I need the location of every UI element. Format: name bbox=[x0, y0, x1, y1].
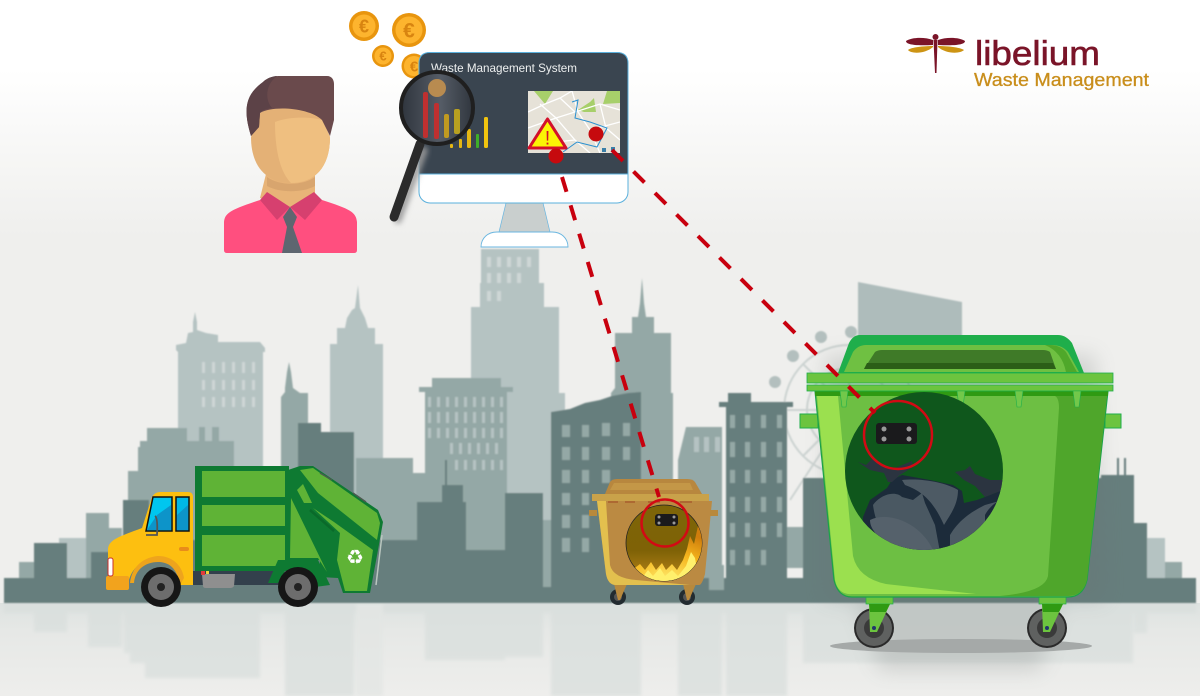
fuel tank bbox=[202, 574, 235, 588]
wheels bbox=[610, 584, 696, 605]
lid bbox=[838, 335, 1084, 373]
dragonfly icon bbox=[906, 34, 965, 73]
coin: € bbox=[359, 16, 369, 36]
cargo box bbox=[195, 466, 289, 571]
collar bbox=[260, 192, 322, 220]
lid opening bbox=[864, 350, 1056, 369]
magnified bars bbox=[423, 92, 460, 139]
top band bbox=[815, 391, 1108, 396]
body bbox=[597, 501, 712, 585]
stand base bbox=[481, 232, 568, 247]
coin: € bbox=[379, 48, 387, 64]
magnified coin bbox=[428, 79, 446, 97]
alert dot bbox=[548, 148, 564, 164]
knot right bbox=[955, 466, 1003, 497]
hole bbox=[845, 392, 1003, 550]
tie bbox=[282, 207, 302, 253]
bag panel bbox=[902, 479, 958, 525]
left highlight bbox=[597, 501, 690, 585]
tail lights bbox=[201, 571, 205, 575]
headlight bbox=[108, 558, 113, 576]
tower windows bbox=[202, 257, 531, 407]
cargo panels bbox=[202, 471, 285, 566]
cab arch highlight bbox=[130, 556, 184, 585]
coin: € bbox=[403, 20, 415, 42]
rear wheel arch bbox=[268, 560, 330, 587]
mirror bbox=[146, 516, 157, 535]
dashed link: monitor to large bin bbox=[612, 150, 875, 413]
dark-building windows bbox=[562, 415, 782, 565]
subtitle: Waste Management bbox=[974, 70, 1149, 90]
rim dashes bbox=[608, 501, 692, 503]
tailgate rail bbox=[376, 535, 382, 585]
right shade bbox=[1000, 396, 1107, 596]
stand bbox=[499, 203, 550, 232]
garbage bags bbox=[858, 459, 1002, 550]
rim bbox=[592, 494, 709, 501]
rear compactor bbox=[288, 466, 383, 593]
screen body bbox=[419, 52, 628, 203]
underframe bbox=[193, 571, 283, 585]
sensor bbox=[655, 514, 678, 526]
handle shadow bbox=[398, 150, 424, 220]
ground reflection area bbox=[0, 603, 1200, 696]
coin: € bbox=[410, 58, 419, 76]
large green bin bbox=[800, 335, 1121, 653]
wheels bbox=[854, 608, 1067, 648]
hole bbox=[626, 505, 702, 581]
bag panel bbox=[870, 517, 932, 550]
front wheel bbox=[141, 567, 181, 607]
cab bbox=[108, 492, 193, 585]
euro coins bbox=[349, 11, 426, 78]
left highlight bbox=[817, 396, 976, 594]
ribs bbox=[840, 391, 1081, 407]
brand name: libelium bbox=[975, 35, 1100, 73]
recycling symbol: ♻ bbox=[346, 547, 364, 569]
handle bbox=[394, 144, 420, 217]
face bbox=[251, 106, 330, 183]
neck bbox=[260, 170, 315, 208]
alert dot bbox=[588, 126, 604, 142]
magnifying glass bbox=[394, 72, 473, 220]
lens bbox=[401, 72, 473, 144]
small overflowing brown bin bbox=[589, 479, 718, 605]
tail section bbox=[313, 508, 373, 591]
light columns in front of base bbox=[543, 520, 803, 590]
right bag fold bbox=[985, 502, 997, 521]
bin body bbox=[815, 391, 1108, 597]
side handles bbox=[800, 414, 818, 428]
warning triangle: ! bbox=[545, 128, 550, 150]
lid bbox=[605, 479, 702, 494]
far light towers bbox=[59, 249, 1165, 603]
city skyline bbox=[4, 249, 1196, 603]
rim bbox=[807, 373, 1113, 383]
compactor arm bbox=[310, 510, 334, 531]
bag panel bbox=[873, 493, 940, 552]
computer monitor bbox=[419, 52, 628, 247]
door handle bbox=[179, 547, 189, 551]
upper hopper bbox=[300, 468, 380, 540]
garbage truck bbox=[106, 466, 383, 607]
rear wheel bbox=[278, 567, 318, 607]
dark display bbox=[419, 52, 628, 174]
bag silhouette bbox=[863, 475, 1000, 550]
screen title: Waste Management System bbox=[431, 61, 577, 75]
right bag bbox=[950, 502, 997, 546]
mid-tone buildings bbox=[19, 278, 1182, 603]
windows bbox=[146, 497, 189, 531]
wheel forks bbox=[866, 596, 1066, 632]
fire bbox=[635, 526, 702, 581]
skyline reflection bbox=[4, 603, 1196, 696]
ground shadow bbox=[830, 639, 1092, 653]
sensor ring bbox=[642, 500, 688, 546]
dark foreground buildings bbox=[4, 392, 1196, 603]
ferris wheel bbox=[769, 326, 914, 500]
person bbox=[224, 76, 357, 253]
handles bbox=[320, 473, 366, 502]
shadow of big bin bbox=[825, 355, 1105, 670]
sensor ring bbox=[864, 401, 932, 469]
mid-building windows bbox=[428, 397, 720, 470]
hair bbox=[247, 76, 334, 136]
map bbox=[528, 91, 620, 153]
bumper bbox=[106, 576, 129, 590]
warning triangle bbox=[529, 119, 566, 150]
dashed link: monitor to small bin bbox=[562, 177, 659, 497]
compactor side panel bbox=[290, 498, 327, 572]
side handles bbox=[589, 510, 718, 516]
libelium logo bbox=[906, 34, 1149, 90]
sensor bbox=[876, 423, 917, 444]
knot left bbox=[858, 458, 913, 482]
shirt bbox=[224, 200, 357, 253]
bars outside magnifier bbox=[450, 117, 488, 148]
